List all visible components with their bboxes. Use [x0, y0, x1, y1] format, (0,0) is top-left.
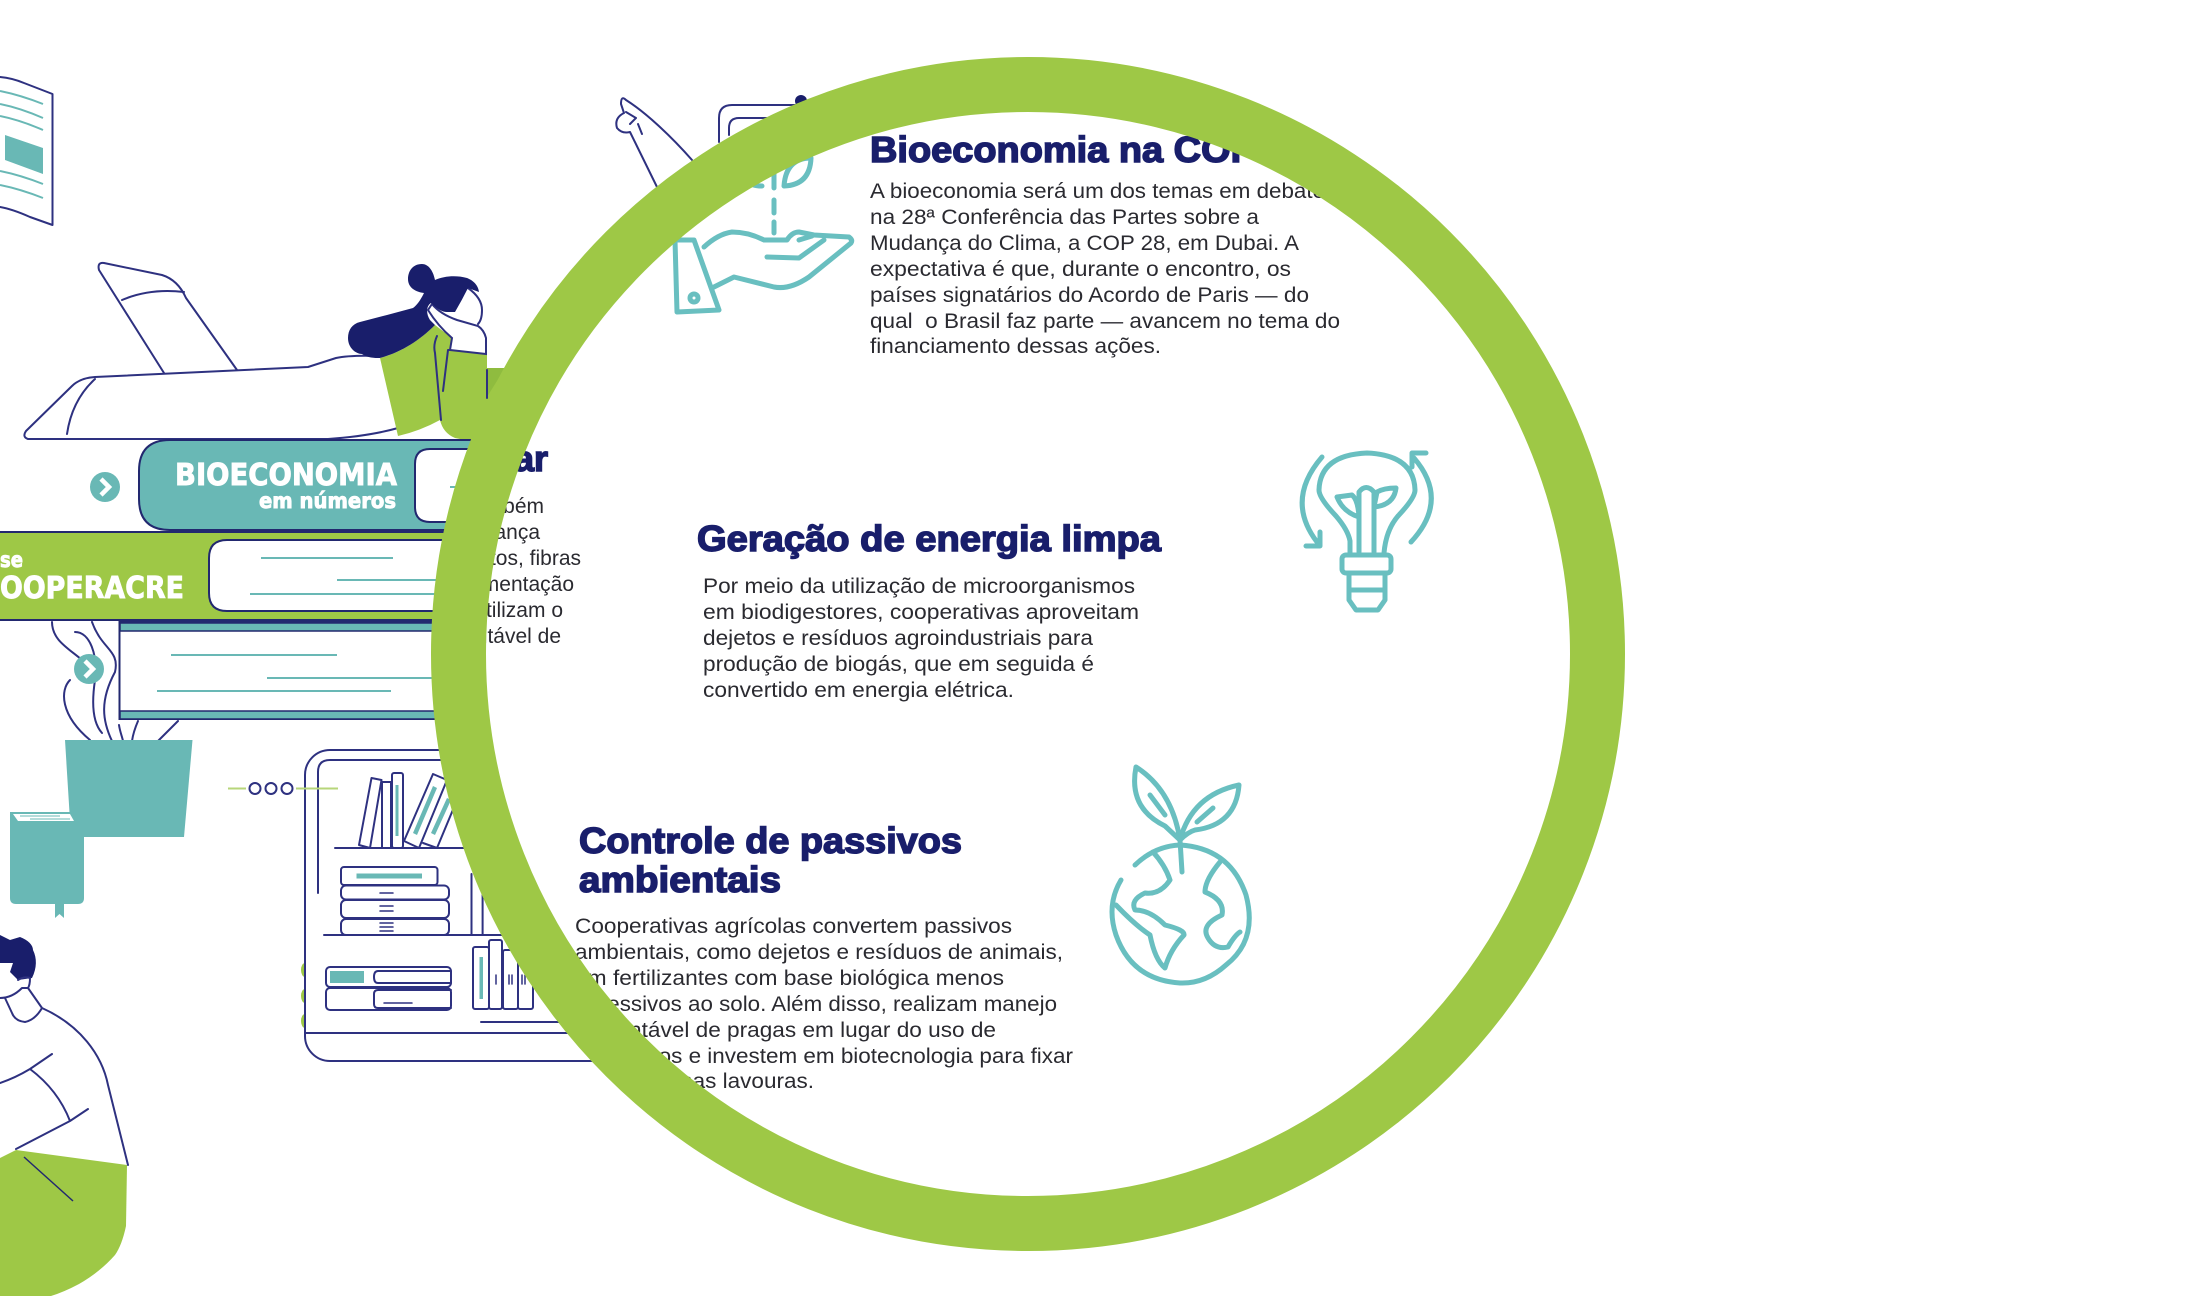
- illustration: man with arms crossed: [0, 935, 128, 1296]
- body text: [870, 180, 1340, 358]
- body text: Cooperativas agrícolas convertem passivos: [575, 915, 1012, 938]
- green ring frame: [458, 84, 1598, 1224]
- body text: A bioeconomia será um dos temas em debate: [870, 180, 1325, 203]
- body text: financiamento dessas ações.: [870, 335, 1161, 358]
- book title: BIOECONOMIA: [175, 458, 398, 493]
- body text: nitrogênio nas lavouras.: [575, 1070, 814, 1093]
- body text: defensivos e investem em biotecnologia para fixar: [575, 1045, 1073, 1068]
- illustration: pointing hand and frame behind ring: [616, 95, 807, 187]
- section: Bioeconomia na COP: [675, 129, 1340, 358]
- body text: ambientais, como dejetos e resíduos de animais,: [575, 941, 1063, 964]
- body text: Mudança do Clima, a COP 28, em Dubai. A: [870, 232, 1299, 255]
- illustration: teal book: [10, 812, 84, 918]
- icon: hand with sprout: [675, 158, 852, 312]
- body text: dejetos e resíduos agroindustriais para: [703, 627, 1093, 650]
- illustration: plant leaves: [52, 622, 178, 741]
- book title: OOPERACRE: [0, 571, 184, 606]
- section: Geração de energia limpa: [697, 453, 1431, 702]
- body text: na 28ª Conferência das Partes sobre a: [870, 206, 1259, 229]
- decorative dots: [228, 783, 338, 794]
- illustration: bookshelf: [305, 750, 705, 1061]
- book subtitle: em números: [259, 489, 396, 513]
- body fragment: [486, 497, 580, 643]
- body text: Por meio da utilização de microorganismos: [703, 575, 1135, 598]
- heading: Bioeconomia na COP 28: [870, 129, 1308, 170]
- heading: Geração de energia limpa: [697, 518, 1162, 559]
- body fragment: ntável de: [476, 625, 561, 648]
- icon: arrow button: [90, 472, 120, 502]
- body text: convertido em energia elétrica.: [703, 679, 1014, 702]
- heading: Controle de passivos: [579, 820, 962, 861]
- white interior of ring: [483, 109, 1573, 1199]
- icon: light bulb with sprout: [1302, 453, 1431, 610]
- section: partially hidden text: [486, 451, 580, 643]
- body text: [575, 915, 1073, 1093]
- illustration: green dots behind shelf: [301, 963, 309, 1028]
- section: Controle de passivos ambientais: [575, 767, 1249, 1093]
- body text: em fertilizantes com base biológica menos: [575, 967, 1004, 990]
- body text: agressivos ao solo. Além disso, realizam manejo: [575, 993, 1057, 1016]
- body fragment: utilizam o: [474, 599, 563, 622]
- infographic canvas: [0, 57, 1625, 1296]
- heading line two: ambientais: [579, 859, 781, 900]
- book label: se: [0, 548, 23, 572]
- icon: arrow button: [74, 654, 104, 684]
- body fragment: ntos, fibras: [478, 547, 581, 570]
- body fragment: dança: [483, 521, 540, 544]
- body fragment: limentação: [472, 573, 574, 596]
- body text: em biodigestores, cooperativas aproveitam: [703, 601, 1139, 624]
- illustration: teal pot: [65, 740, 192, 837]
- body text: expectativa é que, durante o encontro, os: [870, 258, 1291, 281]
- body text: países signatários do Acordo de Paris — do: [870, 284, 1309, 307]
- body text: [703, 575, 1139, 702]
- illustration: woman reading on laptop: [24, 263, 560, 441]
- book: third book: [120, 622, 640, 719]
- illustration: open magazine: [0, 77, 52, 225]
- heading fragment: ntar: [480, 438, 548, 479]
- body text: produção de biogás, que em seguida é: [703, 653, 1094, 676]
- icon: globe with sprout: [1112, 767, 1249, 983]
- body text: qual o Brasil faz parte — avancem no tema do: [870, 310, 1340, 333]
- book: Bioeconomia em números: [139, 440, 640, 530]
- body fragment: mbém: [486, 495, 544, 518]
- body text: sustentável de pragas em lugar do uso de: [575, 1019, 996, 1042]
- book: Case Cooperacre: [0, 532, 640, 620]
